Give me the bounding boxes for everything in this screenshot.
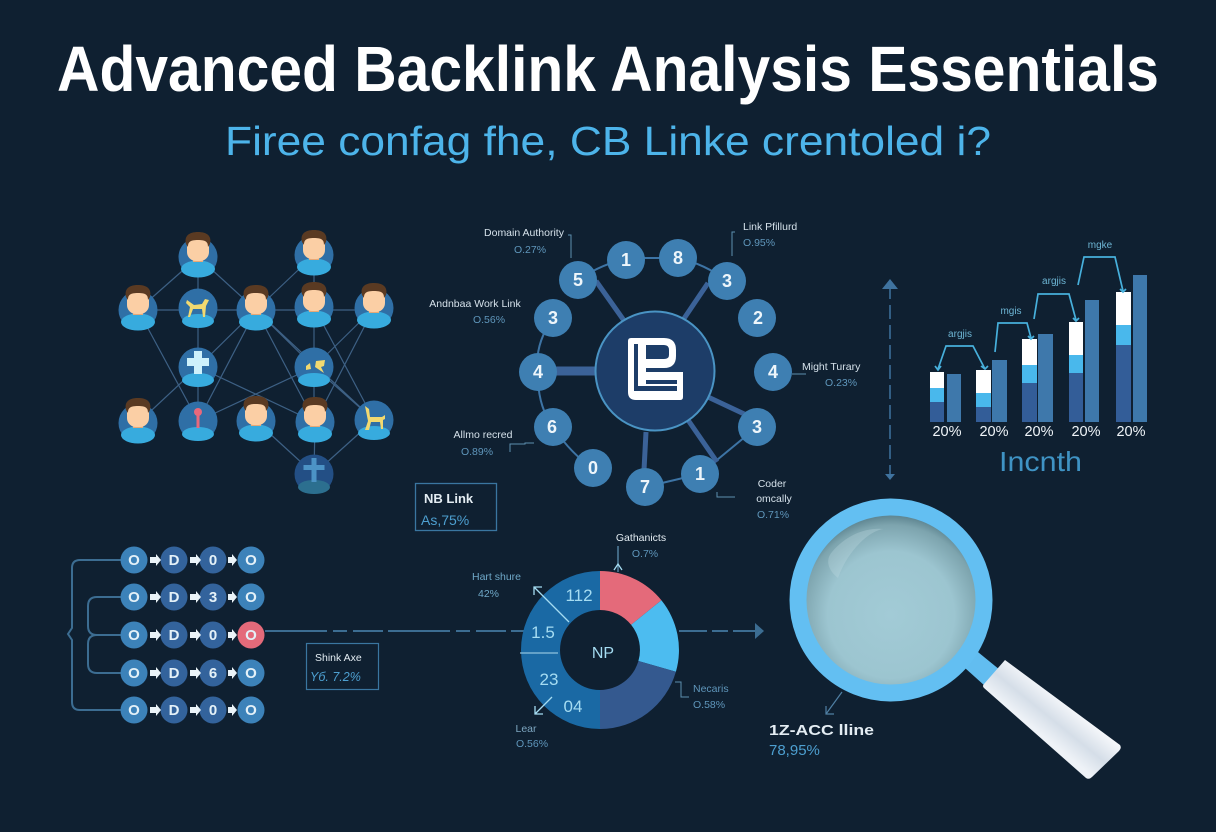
label: necaris: Necaris [693, 683, 729, 695]
network diagram [118, 230, 394, 494]
callout: 12-ACC line: 78,95% [769, 742, 820, 759]
callout: NB Link [416, 484, 496, 530]
label: andnbaa work link: O.56% [473, 314, 505, 326]
person node [296, 397, 334, 442]
callout: shink axe: Yб. 7.2% [310, 670, 361, 684]
node numbers: 4 [768, 362, 778, 382]
row letters: D [169, 552, 180, 569]
row letters: O [245, 627, 257, 644]
bar annotations: argjis [1042, 276, 1066, 287]
callout: 12-ACC line [769, 722, 874, 759]
bracket arrows [935, 257, 1126, 370]
label: hart shure: Hart shure [472, 571, 521, 583]
label: lear [515, 723, 548, 750]
label: andnbaa work link [429, 298, 521, 326]
percent labels: 20% [1024, 424, 1054, 440]
label: gathanicts [616, 532, 666, 560]
right arrow [679, 623, 764, 639]
dashed vertical arrow [882, 279, 898, 480]
connector line [265, 630, 524, 632]
badge: cross [178, 348, 218, 387]
row letters [128, 552, 257, 719]
row letters: D [169, 589, 180, 606]
donut values: 1.5 [531, 623, 555, 642]
badge: red pin [178, 402, 218, 441]
node numbers: 5 [573, 270, 583, 290]
chart caption: Incnth [999, 446, 1082, 477]
label: andnbaa work link: Andnbaa Work Link [429, 298, 521, 310]
callout: shink axe: Shink Axe [315, 652, 362, 664]
subtitle: Firee confag fhe, CB Linke crentoled i? [225, 118, 991, 164]
magnifying glass [798, 507, 1121, 779]
row letters: 0 [209, 702, 217, 719]
callout: NB Link: As,75% [421, 512, 469, 528]
label: gathanicts: O.7% [632, 548, 658, 560]
person node [118, 398, 158, 444]
row letters: O [245, 552, 257, 569]
label: coder omcally: Coder [758, 478, 787, 490]
label: allmo recred: Allmo recred [454, 429, 513, 441]
bar chart [930, 240, 1147, 477]
label: domain authority [484, 227, 565, 256]
badge: yellow animal [178, 288, 218, 328]
callout: 12-ACC line: 1Z-ACC lline [769, 722, 874, 739]
percent labels [932, 424, 1146, 440]
person node [118, 285, 158, 330]
badge: yellow animal [294, 348, 334, 387]
label: might turary: Might Turary [802, 361, 861, 373]
node numbers: 7 [640, 477, 650, 497]
numbered nodes [519, 239, 792, 506]
donut values: 04 [564, 697, 582, 716]
row arrows [150, 554, 237, 716]
person node [178, 232, 218, 278]
label: necaris: O.58% [693, 699, 725, 711]
central logo circle [596, 312, 714, 430]
label: might turary [802, 361, 861, 389]
row letters: 0 [209, 552, 217, 569]
bar annotations: mgis [1000, 306, 1022, 317]
label: hart shure [472, 571, 521, 600]
bar annotations [948, 240, 1113, 340]
person node [294, 230, 334, 276]
row letters: O [128, 702, 140, 719]
label: link pillurd: O.95% [743, 237, 775, 249]
node numbers: 8 [673, 248, 683, 268]
callout: shink axe [306, 644, 378, 690]
row circles [120, 546, 264, 724]
row letters: 0 [209, 627, 217, 644]
node numbers: 3 [722, 271, 732, 291]
label: hart shure: 42% [478, 588, 499, 600]
pointer arrow [826, 692, 842, 714]
label: gathanicts: Gathanicts [616, 532, 666, 544]
label: domain authority: Domain Authority [484, 227, 565, 239]
bar annotations: mgke [1088, 240, 1113, 251]
label: might turary: O.23% [825, 377, 857, 389]
node numbers: 3 [752, 417, 762, 437]
hub and spoke diagram [429, 221, 861, 521]
node numbers: 3 [548, 308, 558, 328]
row letters: O [128, 665, 140, 682]
label: coder omcally: omcally [756, 493, 793, 505]
percent labels: 20% [932, 424, 962, 440]
row letters: D [169, 702, 180, 719]
donut values [531, 586, 593, 716]
person node [236, 285, 276, 330]
label: coder omcally [756, 478, 793, 521]
label: lear: Lear [515, 723, 537, 735]
row letters: 6 [209, 665, 217, 682]
node numbers: 6 [547, 417, 557, 437]
node numbers: 0 [588, 458, 598, 478]
flow rows [68, 546, 524, 724]
percent labels: 20% [1071, 424, 1101, 440]
row letters: O [245, 665, 257, 682]
row letters: O [245, 702, 257, 719]
row letters: O [128, 589, 140, 606]
node numbers: 1 [621, 250, 631, 270]
row letters: O [128, 552, 140, 569]
person node [294, 282, 334, 328]
label: lear: O.56% [516, 738, 548, 750]
percent labels: 20% [979, 424, 1009, 440]
row letters: O [128, 627, 140, 644]
donut arrows [534, 546, 622, 714]
badge: dark cross [294, 454, 334, 494]
node numbers [533, 248, 778, 497]
label: link pillurd: Link Pfillurd [743, 221, 797, 233]
percent labels: 20% [1116, 424, 1146, 440]
bar annotations: argjis [948, 329, 972, 340]
label: link pillurd [743, 221, 797, 249]
row letters: D [169, 627, 180, 644]
person node [236, 396, 276, 442]
node numbers: 1 [695, 464, 705, 484]
node numbers: 2 [753, 308, 763, 328]
donut values: 23 [540, 670, 558, 689]
node numbers: 4 [533, 362, 543, 382]
label: allmo recred: O.89% [461, 446, 493, 458]
label: necaris [693, 683, 729, 711]
row letters: O [245, 589, 257, 606]
bracket [68, 560, 121, 710]
callout: NB Link: NB Link [424, 491, 474, 506]
row letters: 3 [209, 589, 217, 606]
label: allmo recred [454, 429, 513, 458]
donut centre label: NP [592, 645, 614, 662]
highlighted red node [238, 622, 264, 648]
donut values: 112 [565, 586, 593, 605]
badge: yellow horse [354, 400, 394, 440]
row letters: D [169, 665, 180, 682]
donut chart [472, 532, 764, 750]
label: coder omcally: O.71% [757, 509, 789, 521]
person node [354, 283, 394, 328]
label: domain authority: O.27% [514, 244, 546, 256]
